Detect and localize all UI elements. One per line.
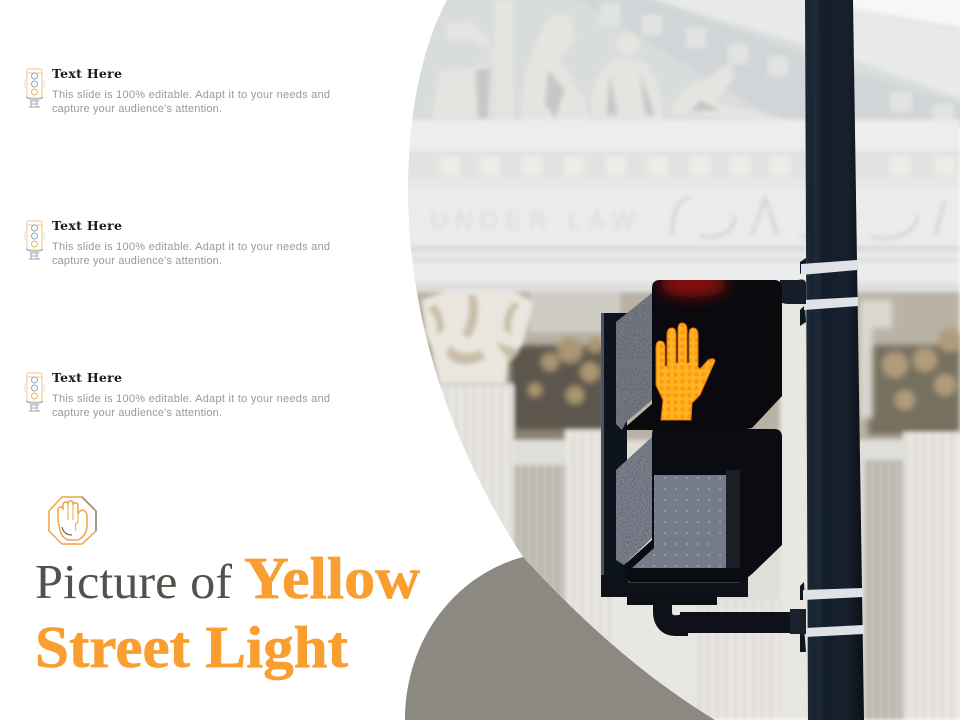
text block: This slide is 100% editable. Adapt it to your needs and bbox=[52, 393, 330, 405]
building background bbox=[400, 0, 960, 720]
list item 3 bbox=[25, 370, 330, 419]
lower visor side bbox=[616, 437, 652, 565]
visor side bbox=[616, 293, 652, 430]
text block: capture your audience's attention. bbox=[52, 103, 222, 115]
list item 2 bbox=[25, 218, 330, 267]
title bbox=[35, 545, 420, 680]
mounting bands bbox=[801, 260, 864, 637]
icon: stop hand octagon bbox=[49, 497, 96, 544]
heading: Text Here bbox=[52, 370, 122, 385]
frieze inscription: UNDER LAW bbox=[430, 207, 635, 235]
hand signal bbox=[656, 323, 715, 420]
pediment statues bbox=[432, 0, 790, 120]
icon: traffic light bbox=[25, 69, 44, 107]
upper support arm bbox=[780, 280, 806, 304]
heading: Text Here bbox=[52, 66, 122, 81]
text block: capture your audience's attention. bbox=[52, 407, 222, 419]
title: Yellow bbox=[244, 545, 420, 611]
grey corner shape bbox=[405, 557, 715, 720]
lower signal head bbox=[616, 429, 782, 582]
text block bbox=[52, 241, 330, 267]
photo: courthouse with pedestrian signal bbox=[400, 0, 960, 720]
title: Street Light bbox=[35, 614, 348, 680]
text block bbox=[52, 89, 330, 115]
rear colonnade shadow bbox=[400, 292, 960, 442]
title: Picture of bbox=[35, 554, 233, 609]
dark foliage bbox=[420, 298, 960, 442]
entablature bbox=[412, 119, 960, 130]
signal backplate bbox=[601, 313, 748, 605]
pole bbox=[800, 0, 864, 720]
icon: traffic light bbox=[25, 373, 44, 411]
text block bbox=[52, 393, 330, 419]
list item 1 bbox=[25, 66, 330, 115]
heading: Text Here bbox=[52, 218, 122, 233]
text block: This slide is 100% editable. Adapt it to your needs and bbox=[52, 89, 330, 101]
red lamp glow bbox=[659, 271, 727, 297]
text block: capture your audience's attention. bbox=[52, 255, 222, 267]
text block: This slide is 100% editable. Adapt it to your needs and bbox=[52, 241, 330, 253]
lower support arm bbox=[653, 605, 806, 636]
sky bbox=[853, 1, 959, 26]
pediment bbox=[400, 0, 960, 125]
upper signal head bbox=[616, 271, 782, 430]
capitals and columns bbox=[512, 436, 903, 715]
icon: traffic light bbox=[25, 221, 44, 259]
lower LED panel bbox=[632, 475, 726, 568]
